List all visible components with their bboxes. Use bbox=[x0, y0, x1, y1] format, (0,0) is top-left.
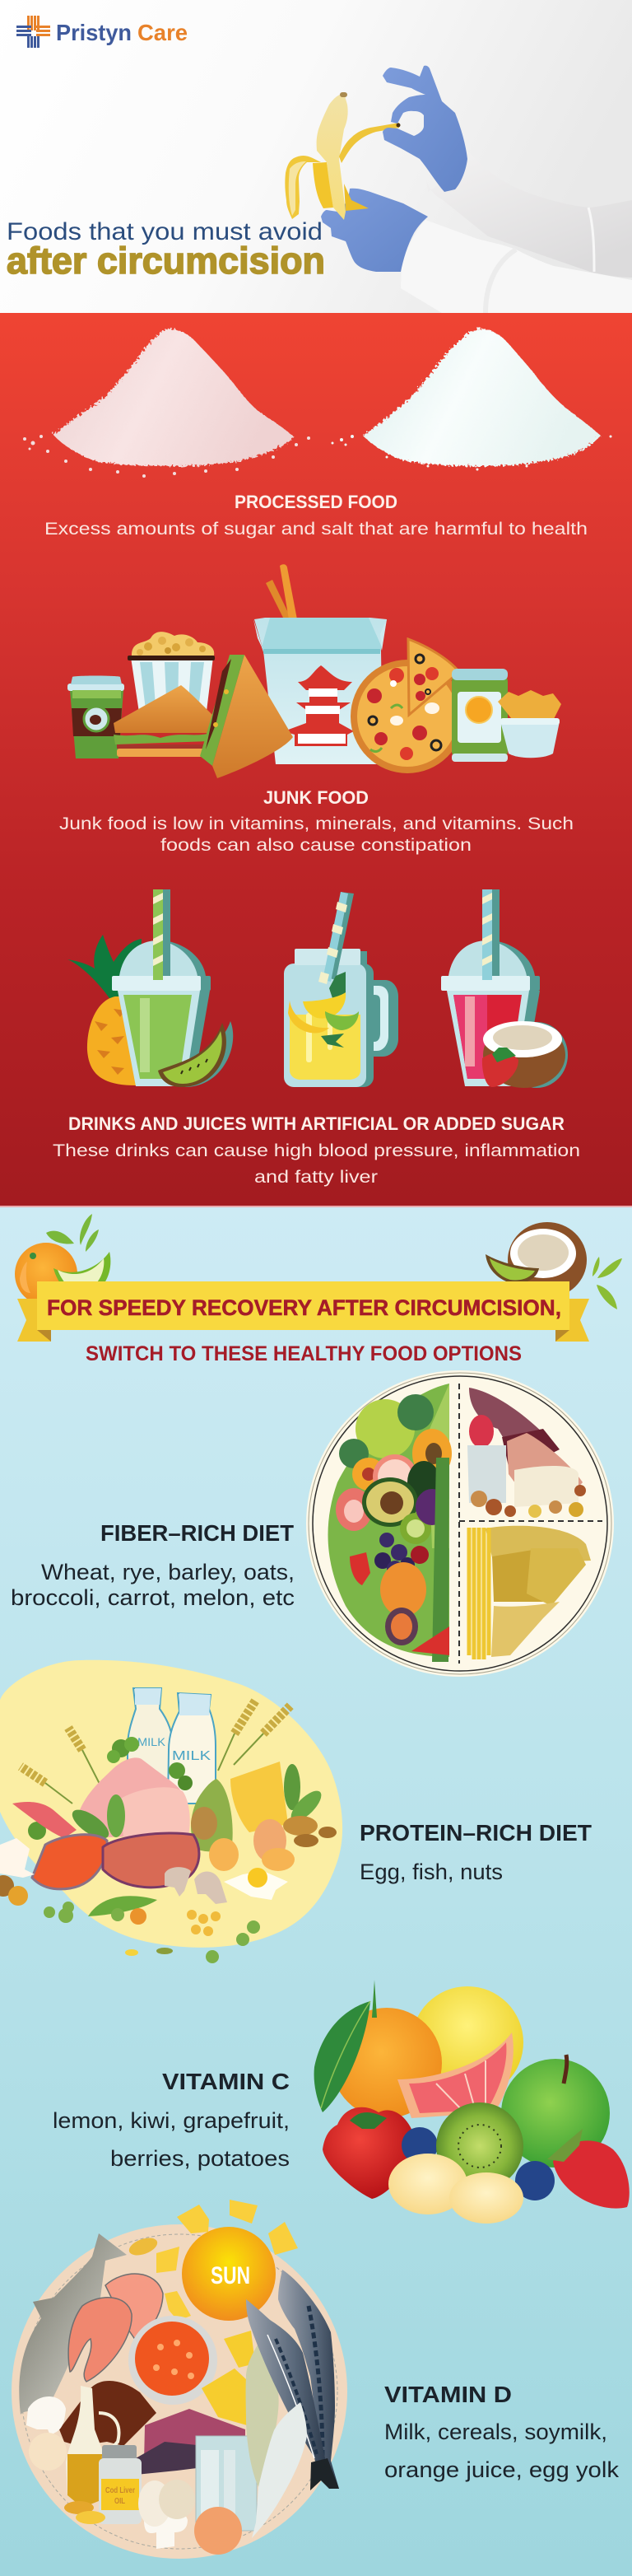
grapefruit wedge bbox=[397, 2032, 514, 2118]
mackerel left bbox=[246, 2299, 325, 2478]
sardine bottom bbox=[252, 2402, 307, 2538]
cup bbox=[112, 940, 211, 1086]
leaves bbox=[67, 1764, 326, 1844]
heading: processed food: PROCESSED FOOD bbox=[235, 492, 397, 512]
plate bbox=[12, 2224, 347, 2559]
heading: vitamin D: VITAMIN D bbox=[384, 2382, 512, 2407]
photo: upper gloved hand bbox=[383, 66, 467, 192]
milk bottles: MILK bbox=[172, 1749, 211, 1763]
snack bowl bbox=[498, 690, 561, 758]
banana slices bbox=[388, 2154, 523, 2224]
text: drinks description line two: and fatty liver bbox=[254, 1168, 378, 1187]
dark tail fins bbox=[310, 2458, 339, 2490]
handle inner bbox=[362, 986, 388, 1051]
sun bbox=[182, 2227, 276, 2321]
wheat stalks bbox=[21, 1700, 290, 1804]
hero panel bbox=[0, 0, 632, 313]
shrimp bbox=[12, 1802, 77, 1838]
yellow blob bbox=[0, 1660, 342, 1948]
illustration: protein foods on yellow blob bbox=[0, 1660, 342, 1963]
sandwich, upright bbox=[200, 655, 293, 778]
red pepper bbox=[323, 2107, 416, 2199]
illustration: coconut, kiwi and splash bbox=[486, 1222, 622, 1309]
popcorn bucket bbox=[128, 632, 215, 718]
text: vitamin C foods line one: lemon, kiwi, grapefruit, bbox=[53, 2108, 290, 2133]
green apple bbox=[501, 2055, 610, 2168]
heading: fiber-rich diet: FIBER–RICH DIET bbox=[100, 1520, 294, 1546]
cod liver oil bottle bbox=[99, 2445, 142, 2524]
plate bbox=[306, 1370, 614, 1677]
illustration: vitamin C fruits bbox=[314, 1980, 630, 2224]
caviar bowl bbox=[128, 2316, 217, 2405]
blueberries bbox=[402, 2127, 555, 2200]
take-out box bbox=[253, 618, 387, 764]
sub heading: SWITCH TO THESE HEALTHY FOOD OPTIONS bbox=[86, 1342, 522, 1365]
oil jug bbox=[66, 2386, 118, 2508]
jar body bbox=[284, 949, 374, 1087]
grains quarter bbox=[469, 1526, 591, 1659]
brown liver bbox=[59, 2381, 156, 2446]
juice can bbox=[452, 669, 508, 762]
heading: vitamin C: VITAMIN C bbox=[162, 2069, 290, 2094]
text: vitamin D foods line one: Milk, cereals, soymilk, bbox=[384, 2420, 607, 2444]
logo wordmark accent: Care bbox=[137, 20, 188, 45]
striped straw bbox=[318, 892, 354, 984]
mackerel right bbox=[278, 2270, 339, 2490]
milk bottles: MILK bbox=[137, 1735, 166, 1748]
mushrooms bbox=[26, 2396, 188, 2549]
pineapple bbox=[67, 935, 142, 1085]
capsules bbox=[64, 2234, 160, 2524]
salmon steaks bbox=[68, 2274, 163, 2382]
kiwi slice bbox=[158, 1021, 233, 1087]
chicken bbox=[77, 1757, 190, 1837]
cod liver oil bottle: Cod Liver bbox=[105, 2486, 135, 2495]
title line one: Foods that you must avoid bbox=[7, 218, 323, 245]
panel: healthy food options bbox=[0, 1206, 632, 2576]
text: junk food description line one: Junk food is low in vitamins, minerals, and vitamins. Such bbox=[59, 814, 574, 833]
red meat bbox=[103, 1833, 199, 1888]
lemon bbox=[411, 1986, 523, 2098]
avocado bbox=[191, 1779, 233, 1851]
illustration: vitamin D foods plate bbox=[12, 2200, 347, 2559]
tuna bbox=[136, 2409, 245, 2475]
sun label: SUN bbox=[211, 2262, 250, 2289]
heading: drinks and juices: DRINKS AND JUICES WITH ARTIFICIAL OR ADDED SUGAR bbox=[68, 1113, 565, 1134]
whole salmon bbox=[19, 2233, 127, 2415]
strawberry bbox=[482, 1048, 518, 1087]
banner ribbon bbox=[17, 1281, 589, 1342]
mushrooms bbox=[165, 1867, 227, 1904]
text: junk food description line two: foods can also cause constipation bbox=[160, 836, 472, 855]
logo wordmark: Pristyn bbox=[56, 20, 132, 45]
illustration: lemonade jar bbox=[284, 892, 398, 1087]
orange bbox=[332, 2008, 442, 2118]
glass of milk bbox=[196, 2436, 257, 2531]
chopsticks bbox=[266, 564, 297, 619]
egg bbox=[194, 2507, 242, 2555]
illustration: balanced food plate bbox=[306, 1370, 614, 1677]
kiwi bbox=[436, 2102, 523, 2190]
cheese bbox=[230, 1762, 288, 1832]
panel: foods to avoid bbox=[0, 313, 632, 1207]
text: protein foods: Egg, fish, nuts bbox=[360, 1860, 503, 1884]
sun rays bbox=[156, 2200, 298, 2321]
coffee cup bbox=[67, 675, 124, 758]
illustration: junk food group bbox=[67, 564, 561, 778]
leaf and stem bbox=[314, 1980, 377, 2112]
text: fiber foods line two: broccoli, carrot, melon, etc bbox=[11, 1585, 295, 1610]
striped straw bbox=[482, 889, 500, 980]
title line two: after circumcision bbox=[7, 240, 325, 282]
strawberry bbox=[547, 2129, 630, 2209]
cup bbox=[441, 940, 540, 1086]
coconut bbox=[483, 1021, 568, 1088]
handle bbox=[362, 980, 398, 1057]
banner heading: FOR SPEEDY RECOVERY AFTER CIRCUMCISION, bbox=[47, 1295, 561, 1320]
lemon slices and mint bbox=[288, 972, 359, 1048]
heading: protein-rich diet: PROTEIN–RICH DIET bbox=[360, 1820, 592, 1846]
text: processed food description: Excess amounts of sugar and salt that are harmful to health bbox=[44, 520, 588, 539]
cheese bbox=[202, 2331, 255, 2425]
pizza slice bbox=[408, 639, 459, 715]
eggs bbox=[209, 1819, 295, 1900]
heading: junk food: JUNK FOOD bbox=[263, 787, 369, 808]
illustration: orange, lime and splash bbox=[15, 1214, 110, 1305]
photo: lab coat sleeves bbox=[401, 151, 632, 313]
fruits and vegetables half bbox=[328, 1384, 452, 1662]
proteins quarter bbox=[467, 1388, 586, 1518]
image: pink salt pile bbox=[23, 329, 310, 478]
pizza bbox=[351, 660, 464, 773]
icon: Pristyn Care logo bbox=[16, 16, 50, 48]
photo: banana bbox=[285, 92, 400, 220]
text: vitamin C foods line two: berries, potatoes bbox=[110, 2146, 290, 2171]
nuts and tofu bbox=[0, 1816, 337, 1906]
text: vitamin D foods line two: orange juice, egg yolk bbox=[384, 2457, 620, 2482]
sandwich, lying bbox=[114, 685, 212, 757]
text: drinks description line one: These drinks can cause high blood pressure, inflammation bbox=[53, 1141, 580, 1160]
image: white salt pile bbox=[331, 329, 612, 471]
broccoli bbox=[28, 1737, 193, 1840]
salmon steak bbox=[32, 1835, 107, 1889]
sardine bbox=[246, 2344, 279, 2487]
illustration: green smoothie with pineapple and kiwi bbox=[67, 889, 233, 1087]
eggs and potatoes bbox=[29, 2433, 195, 2527]
photo: lower gloved hand bbox=[321, 189, 428, 272]
illustration: red smoothie with coconut and strawberry bbox=[441, 889, 568, 1088]
milk bottles bbox=[128, 1688, 216, 1804]
striped straw bbox=[153, 889, 170, 980]
peas and lentils bbox=[44, 1896, 260, 1963]
text: fiber foods line one: Wheat, rye, barley, oats, bbox=[41, 1560, 295, 1584]
cod liver oil bottle: OIL bbox=[114, 2497, 125, 2506]
